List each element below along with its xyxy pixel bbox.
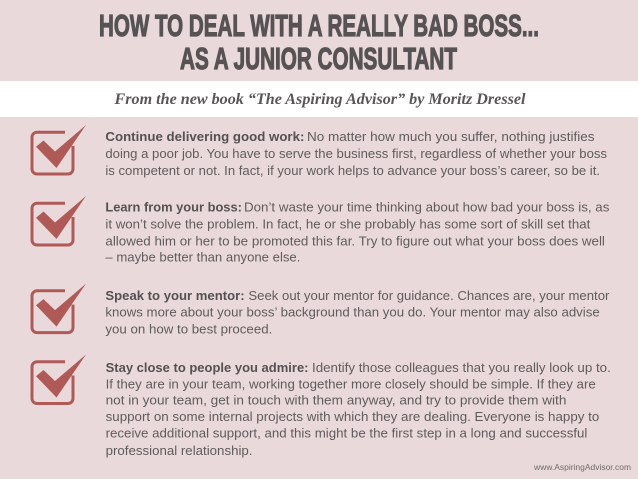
- icon: checkbox 3: [32, 284, 86, 333]
- text: learn from your boss: – maybe better than anyone else.: [105, 250, 300, 265]
- text: stay close to people you admire: [106, 360, 611, 458]
- text: stay close to people you admire: support on some internal projects with which they are dealing. Everyone is happy to: [106, 409, 599, 424]
- text: speak to your mentor: [105, 288, 610, 336]
- subtitle band: From the new book “The Aspiring Advisor” by Moritz Dressel: [113, 91, 526, 108]
- text: speak to your mentor: Speak to your mentor:: [105, 288, 245, 303]
- text: stay close to people you admire: professional relationship.: [106, 443, 252, 458]
- text: stay close to people you admire: Stay close to people you admire:: [106, 360, 308, 375]
- text: learn from your boss: Don’t waste your time thinking about how bad your boss is, as: [244, 200, 609, 215]
- text: speak to your mentor: you on how to best proceed.: [105, 321, 272, 336]
- text: stay close to people you admire: not in your team, get in touch with them anyway, and try to provide them with: [106, 392, 566, 408]
- text: continue delivering good work: Continue delivering good work:: [105, 129, 304, 144]
- text: speak to your mentor: Seek out your mentor for guidance. Chances are, your mentor: [248, 288, 610, 303]
- text: continue delivering good work: No matter how much you suffer, nothing justifies: [307, 129, 594, 144]
- text: speak to your mentor: knows more about your boss’ background than you do. Your mentor may also advise: [105, 305, 600, 320]
- text: continue delivering good work: doing a poor job. You have to serve the business first, regardless of whether your boss: [105, 146, 607, 161]
- text: continue delivering good work: is competent or not. In fact, if your work helps to advance your boss’s career, so be it.: [105, 163, 600, 178]
- title: AS A JUNIOR CONSULTANT: [180, 41, 457, 76]
- text: stay close to people you admire: Identify those colleagues that you really look up to.: [312, 360, 611, 375]
- text: learn from your boss: Learn from your boss:: [105, 200, 242, 215]
- text: continue delivering good work: [105, 129, 607, 178]
- text: learn from your boss: allowed him or her to be promoted this far. Try to figure out what your boss does well: [105, 234, 605, 249]
- text: stay close to people you admire: receive additional support, and this might be the first step in a long and successful: [106, 426, 587, 440]
- text: learn from your boss: it won’t solve the problem. In fact, he or she probably has some sort of skill set that: [105, 217, 591, 232]
- title: [99, 8, 539, 76]
- subtitle band: [0, 81, 638, 117]
- icon: checkbox 1: [32, 125, 86, 174]
- icon: checkbox 4: [32, 354, 86, 404]
- footer url: www.AspiringAdvisor.com: [533, 462, 631, 472]
- text: stay close to people you admire: If they are in your team, working together more closely should be simple. If they are: [106, 376, 596, 392]
- icon: checkbox 2: [32, 196, 86, 245]
- text: learn from your boss: [105, 200, 609, 265]
